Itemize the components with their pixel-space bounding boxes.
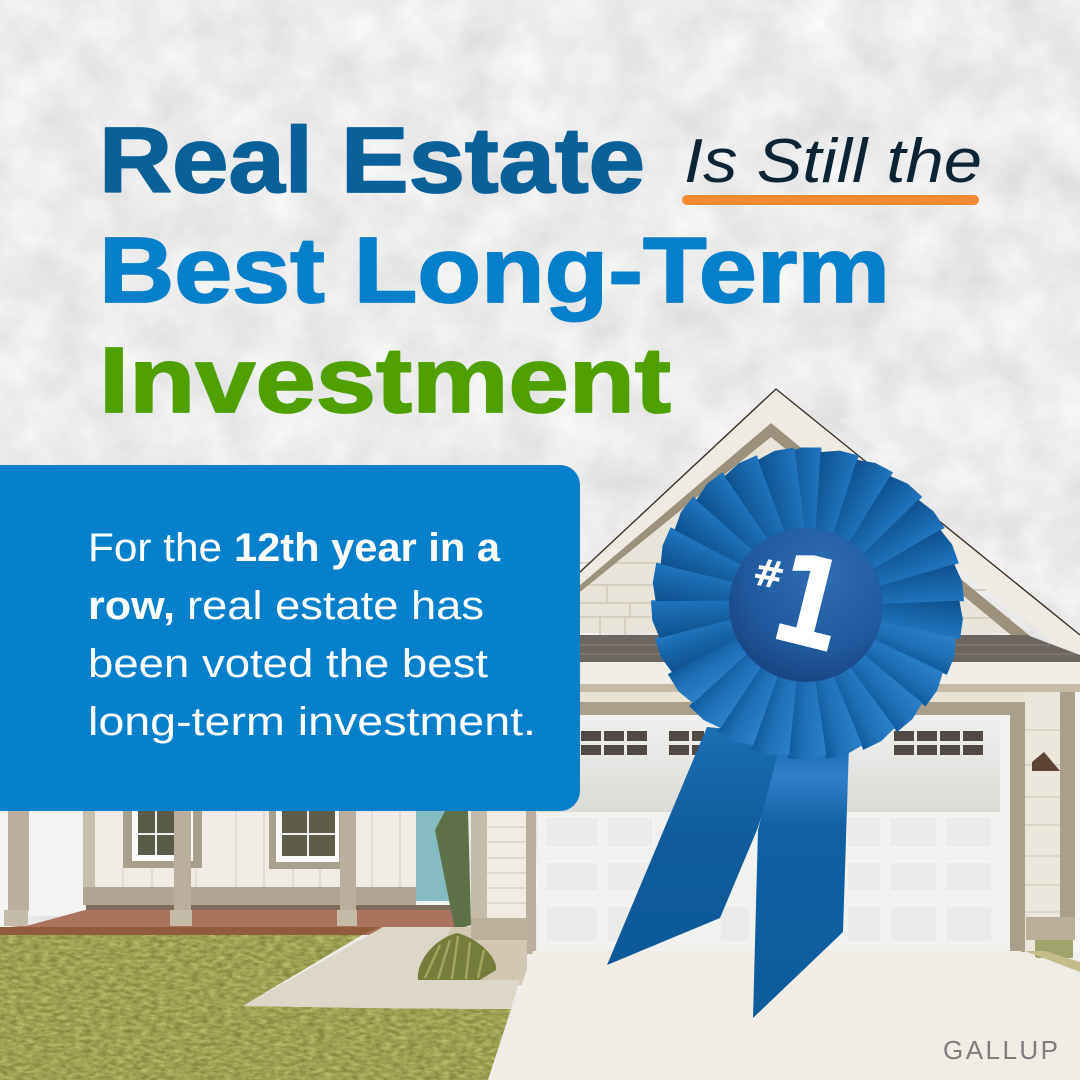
right siding xyxy=(1025,692,1063,951)
panel background xyxy=(0,465,580,811)
source label: GALLUP xyxy=(943,1035,1058,1065)
roof shingles xyxy=(580,635,1080,662)
right entry column xyxy=(486,811,527,919)
eave fascia xyxy=(580,662,1080,684)
gable wall xyxy=(580,437,1017,633)
front door xyxy=(416,811,452,901)
callout text: long-term investment. xyxy=(88,700,536,744)
number 1 badge text: 1 xyxy=(757,525,861,683)
callout text: 12th year in a xyxy=(234,526,501,570)
gable taupe trim xyxy=(580,423,1035,640)
ribbon tail left xyxy=(607,727,790,965)
title line: Investment: Investment xyxy=(99,328,671,432)
wall lamp xyxy=(1032,752,1060,771)
orange underline xyxy=(682,195,979,205)
garage door xyxy=(538,715,1010,951)
porch trim band xyxy=(83,887,416,905)
rosette pleats xyxy=(650,446,965,760)
number 1 badge text: # xyxy=(749,550,788,598)
walkway xyxy=(243,927,520,1009)
ribbon tail right xyxy=(753,745,849,1018)
driveway xyxy=(490,951,1080,1080)
porch wall xyxy=(83,811,416,889)
callout text: been voted the best xyxy=(88,642,488,686)
porch posts xyxy=(4,811,357,926)
title line: Is Still the: Is Still the xyxy=(684,127,982,196)
lawn xyxy=(0,935,511,1080)
gable dark roof edge xyxy=(580,389,1080,635)
garage door windows xyxy=(581,731,983,755)
garage door panels xyxy=(545,817,992,942)
callout text: row, xyxy=(88,584,175,628)
rosette centre button xyxy=(729,528,883,682)
title line: Best Long-Term: Best Long-Term xyxy=(99,218,890,322)
porch windows xyxy=(123,811,340,869)
mulch bed xyxy=(410,927,527,985)
callout text xyxy=(88,526,536,744)
gable white fascia xyxy=(580,389,1080,652)
climbing plant xyxy=(435,811,471,930)
icon: blue ribbon rosette xyxy=(607,446,965,1018)
gable shingle lines xyxy=(580,563,1010,635)
title line: Real Estate: Real Estate xyxy=(99,108,645,212)
left porch background xyxy=(0,811,84,916)
garage door frame xyxy=(1010,702,1025,952)
callout text: real estate has xyxy=(187,584,484,628)
house photo illustration xyxy=(0,389,1080,1080)
brick porch xyxy=(0,910,455,935)
callout panel xyxy=(0,465,580,811)
title xyxy=(99,108,982,432)
ornamental grass bush xyxy=(418,933,496,980)
callout text: For the xyxy=(88,526,222,570)
